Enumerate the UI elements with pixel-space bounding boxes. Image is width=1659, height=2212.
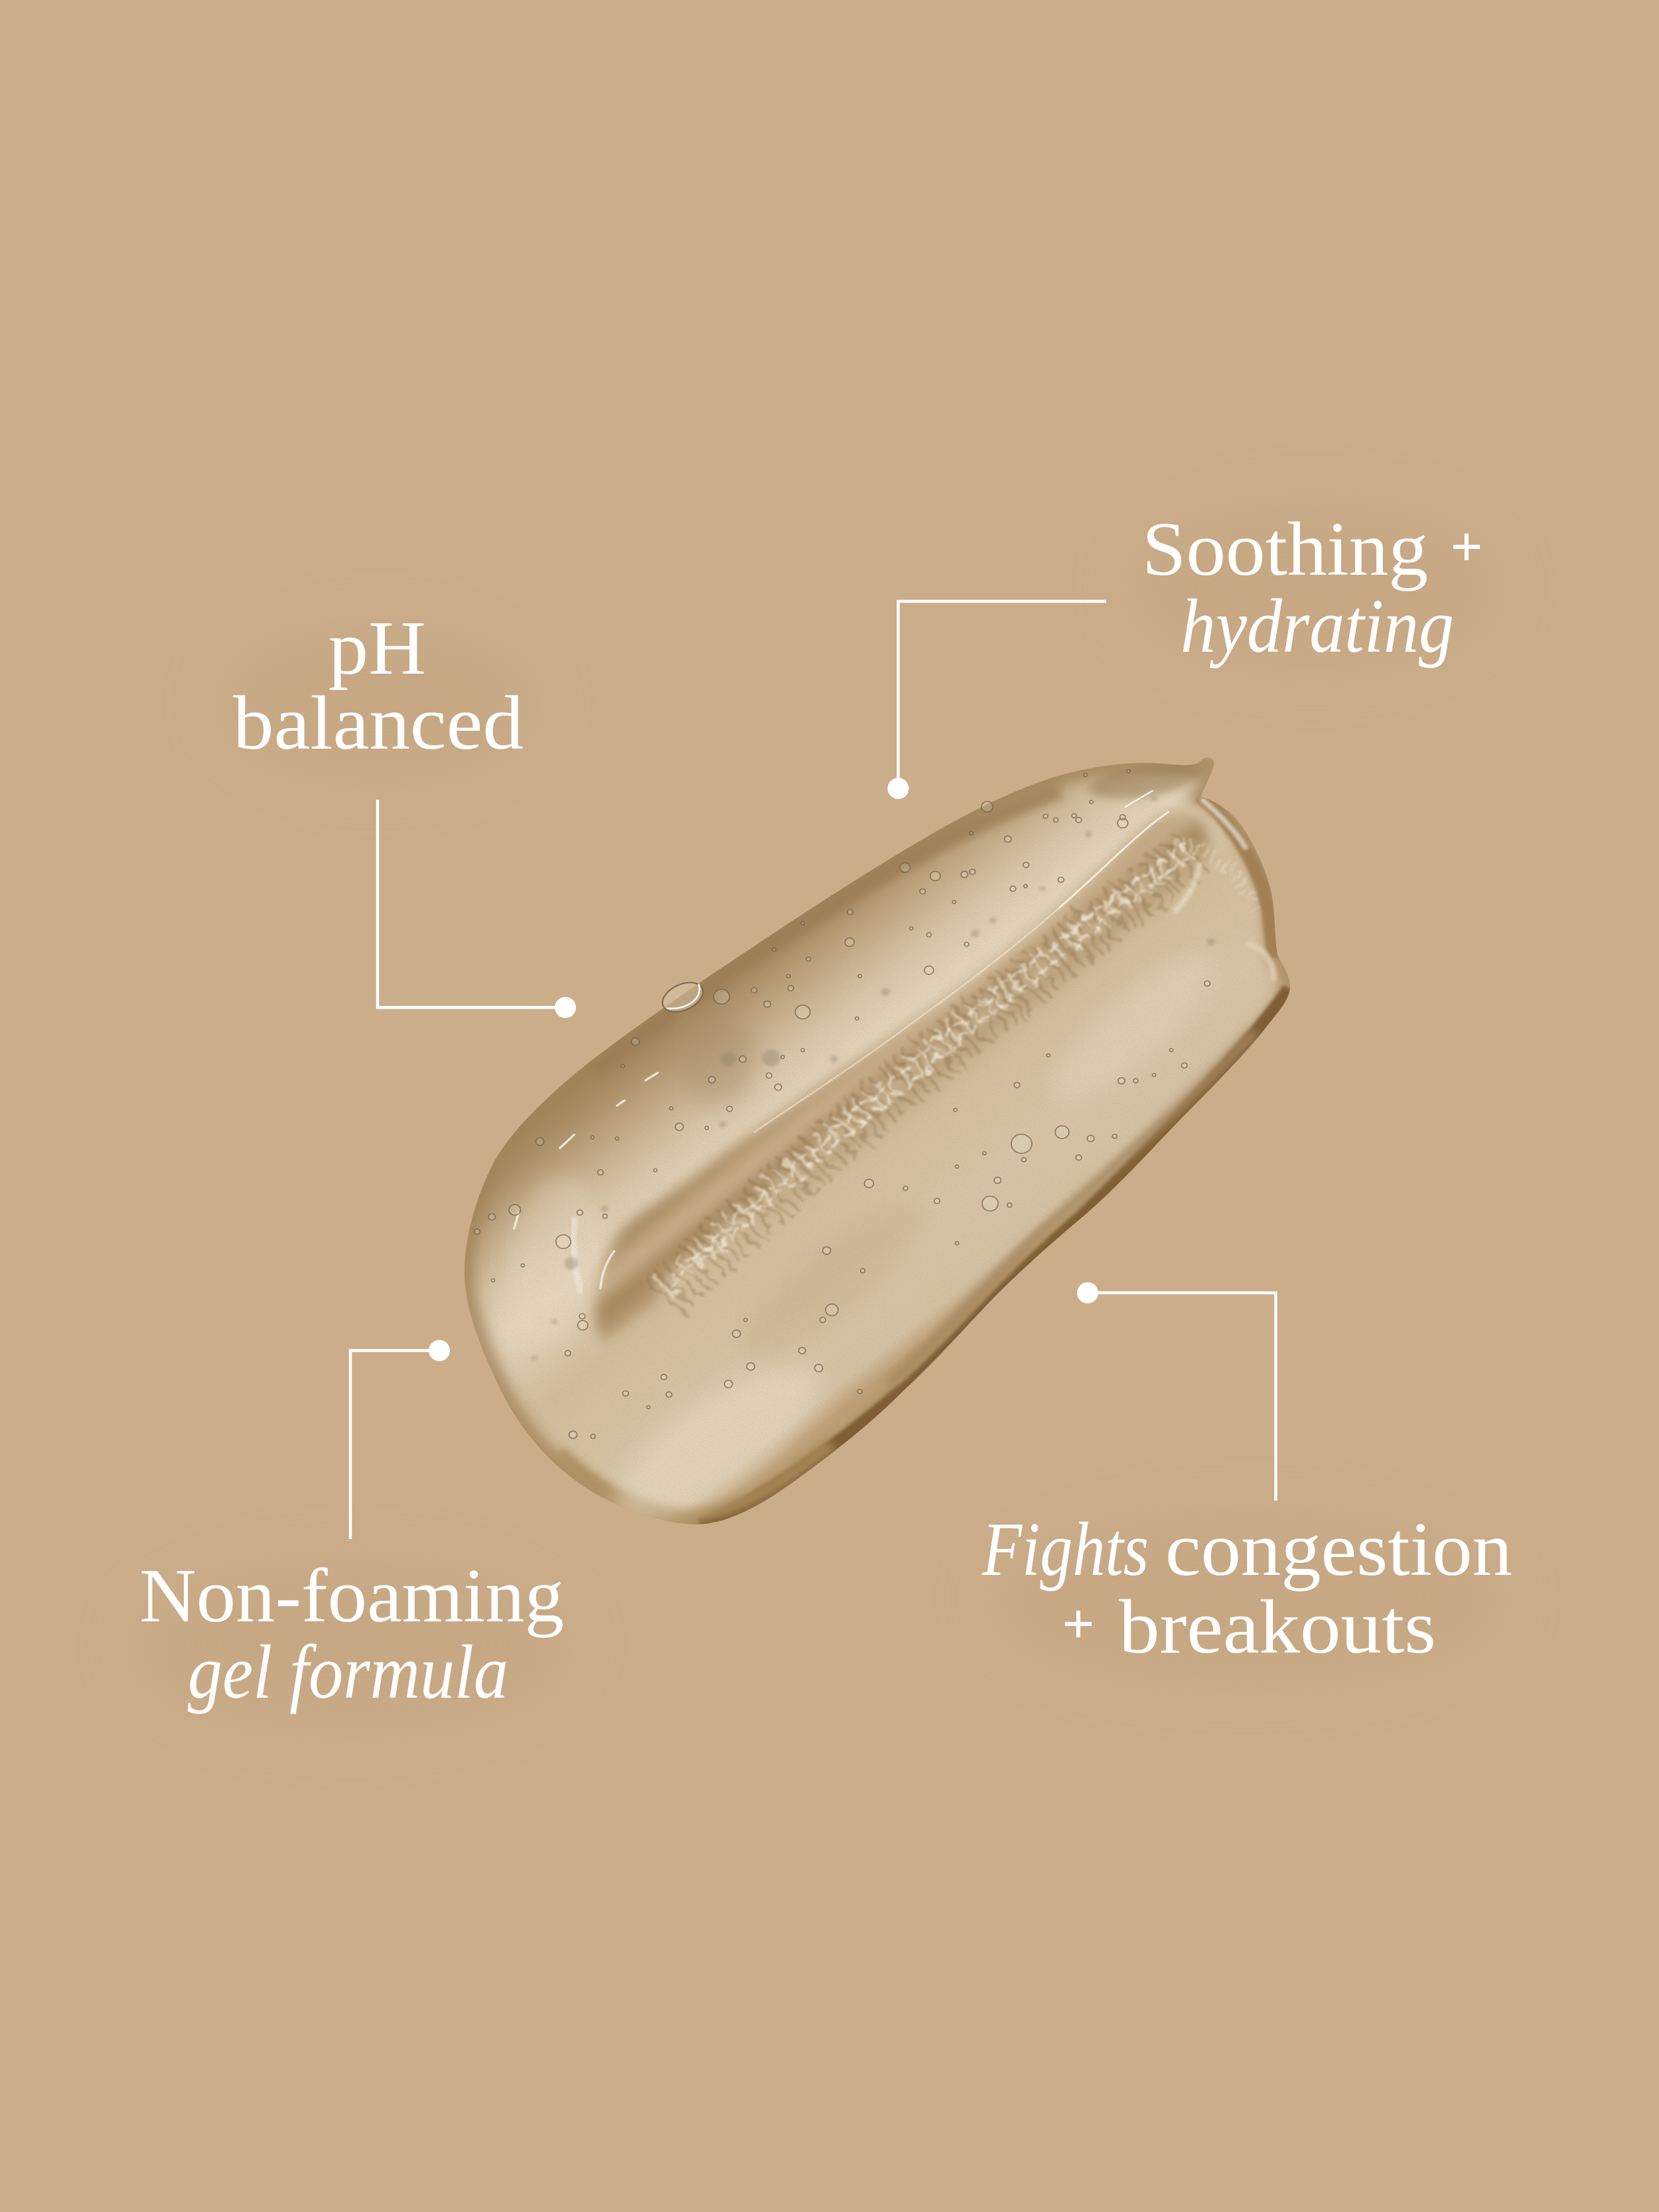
air bubbles: [474, 770, 1210, 1438]
label: pH balanced: balanced: [233, 681, 524, 766]
label: pH balanced: [233, 606, 524, 766]
callout: soothing and hydrating: [888, 507, 1500, 799]
label: Fights congestion + breakouts: [981, 1507, 1512, 1670]
gel swatch: [465, 758, 1290, 1524]
fine grain: [470, 776, 1290, 1524]
gel body: [465, 758, 1290, 1524]
connector line and dot: [1077, 1282, 1275, 1501]
label: Soothing + hydrating: +: [1451, 516, 1482, 577]
label: Fights congestion + breakouts: congestion: [1165, 1507, 1512, 1592]
label: Non-foaming gel formula: Non-foaming: [139, 1554, 564, 1639]
ripple texture: [660, 846, 1194, 1297]
label: Fights congestion + breakouts: breakouts: [1119, 1585, 1436, 1670]
label: Soothing + hydrating: Soothing: [1142, 507, 1428, 592]
grey speckles: [532, 796, 1215, 1361]
connector line and dot: [888, 601, 1106, 799]
large bubble: [657, 976, 708, 1018]
infographic canvas: [141, 522, 1512, 1714]
label: Fights congestion + breakouts: Fights: [981, 1507, 1149, 1592]
label: Fights congestion + breakouts: +: [1063, 1593, 1094, 1654]
groove channel: [595, 810, 1254, 1344]
label: pH balanced: pH: [328, 606, 426, 691]
label: Soothing + hydrating: hydrating: [1181, 584, 1454, 669]
connector line and dot: [350, 1340, 450, 1539]
callout: fights congestion and breakouts: [981, 1282, 1512, 1679]
label: Soothing + hydrating: [1142, 507, 1482, 669]
fold highlights: [514, 791, 1273, 1291]
callout: pH balanced: [219, 606, 576, 1018]
connector line and dot: [378, 800, 576, 1018]
callout: non-foaming gel formula: [133, 1340, 571, 1726]
label: Non-foaming gel formula: gel formula: [188, 1630, 508, 1715]
label: Non-foaming gel formula: [139, 1554, 564, 1715]
